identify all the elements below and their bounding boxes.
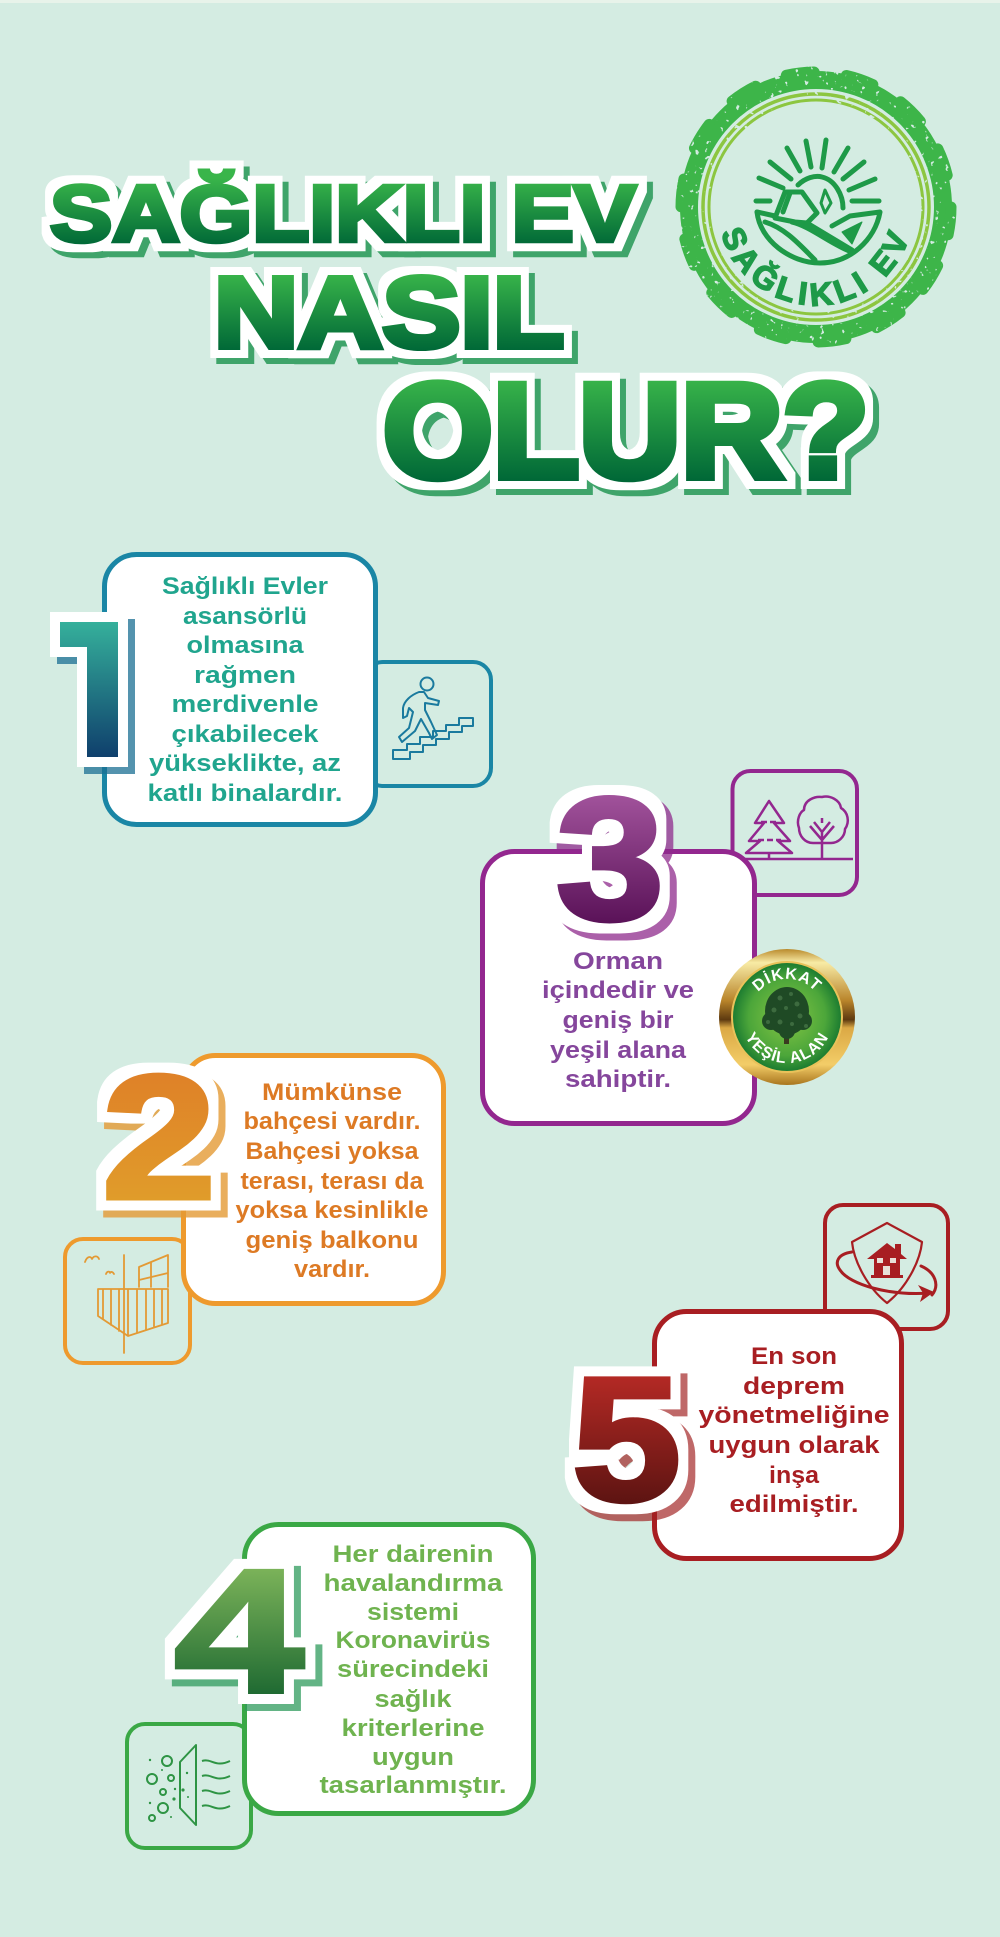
numeral 5: 5 (572, 1342, 681, 1538)
badge: dikkat yeşil alan (719, 949, 855, 1085)
text block: uygun olarak (708, 1432, 880, 1459)
icon: balcony (85, 1255, 168, 1353)
numeral 4: 4 (174, 1534, 304, 1730)
icon box: shield house (825, 1205, 948, 1329)
main box (244, 1524, 534, 1814)
icon: air filter (147, 1745, 230, 1825)
text block: bahçesi vardır. (244, 1108, 420, 1135)
panel 2: garden and balcony (65, 1040, 444, 1363)
stamp scalloped ring (681, 72, 951, 342)
icon: shield house (837, 1223, 936, 1303)
icon box: stairs (365, 662, 491, 786)
text block: edilmiştir. (730, 1491, 858, 1518)
icon: trees (745, 797, 853, 859)
text block (698, 1343, 890, 1518)
main box (104, 554, 376, 824)
panel 4: ventilation (127, 1524, 534, 1848)
stamp logo (676, 66, 956, 348)
text block: rağmen (194, 662, 296, 689)
text block (236, 1079, 428, 1283)
icon box: trees (732, 771, 857, 895)
text block: Her dairenin (332, 1541, 494, 1568)
title line: NASIL: NASIL (214, 257, 564, 369)
text block: terası, terası da (240, 1168, 424, 1195)
text block: deprem (743, 1373, 845, 1400)
text block: Mümkünse (262, 1079, 402, 1106)
numeral 1: 1 (18, 586, 158, 798)
text block: tasarlanmıştır. (320, 1772, 506, 1799)
text block: geniş balkonu (246, 1227, 418, 1254)
icon box: balcony (65, 1239, 190, 1363)
text block (148, 573, 342, 807)
text block: olmasına (186, 632, 304, 659)
panel 5: earthquake regulation (572, 1205, 948, 1558)
panel 3: forest (480, 761, 859, 1126)
text block: sürecindeki (337, 1656, 489, 1683)
text block: çıkabilecek (172, 721, 319, 748)
text block: yönetmeliğine (698, 1402, 890, 1429)
icon box: ventilation (127, 1724, 251, 1848)
text block: inşa (769, 1462, 820, 1489)
title line: SAĞLIKLI EV: SAĞLIKLI EV (50, 169, 636, 258)
text block: sağlık (374, 1686, 452, 1713)
badge tree (762, 987, 812, 1044)
text block: vardır. (294, 1256, 370, 1283)
text block: havalandırma (324, 1570, 503, 1597)
text block (320, 1541, 506, 1799)
main box (482, 852, 754, 1124)
text block: merdivenle (172, 691, 318, 718)
text block: Sağlıklı Evler (162, 573, 328, 600)
stamp label: SAĞLIKLI EV (722, 227, 908, 307)
text block (542, 948, 694, 1093)
text block: Bahçesi yoksa (246, 1138, 419, 1165)
title line: OLUR?: OLUR? (383, 357, 869, 506)
stamp inner double ring (703, 94, 929, 320)
text block: uygun (372, 1744, 454, 1771)
text block: katlı binalardır. (148, 780, 342, 807)
numeral 2: 2 (102, 1040, 216, 1236)
text block: En son (751, 1343, 837, 1370)
text block: sistemi (367, 1599, 459, 1626)
text block: geniş bir (562, 1007, 674, 1034)
text block: yoksa kesinlikle (236, 1197, 428, 1224)
text block: Koronavirüs (336, 1627, 490, 1654)
main box (184, 1056, 444, 1304)
title (50, 169, 869, 506)
main box (654, 1312, 902, 1558)
text block: yeşil alana (550, 1037, 687, 1064)
icon: person climbing stairs (393, 678, 473, 759)
badge label: DİKKAT (752, 968, 822, 992)
text block: kriterlerine (342, 1715, 484, 1742)
numeral 3: 3 (556, 761, 664, 956)
badge label bottom: YEŞİL ALAN (747, 1031, 828, 1064)
text block: içindedir ve (542, 977, 694, 1004)
text block: asansörlü (183, 603, 307, 630)
stamp sun and house emblem (756, 140, 880, 263)
text block: sahiptir. (565, 1066, 671, 1093)
panel 1: stairs (18, 554, 491, 824)
text block: yükseklikte, az (149, 750, 341, 777)
text block: Orman (573, 948, 663, 975)
